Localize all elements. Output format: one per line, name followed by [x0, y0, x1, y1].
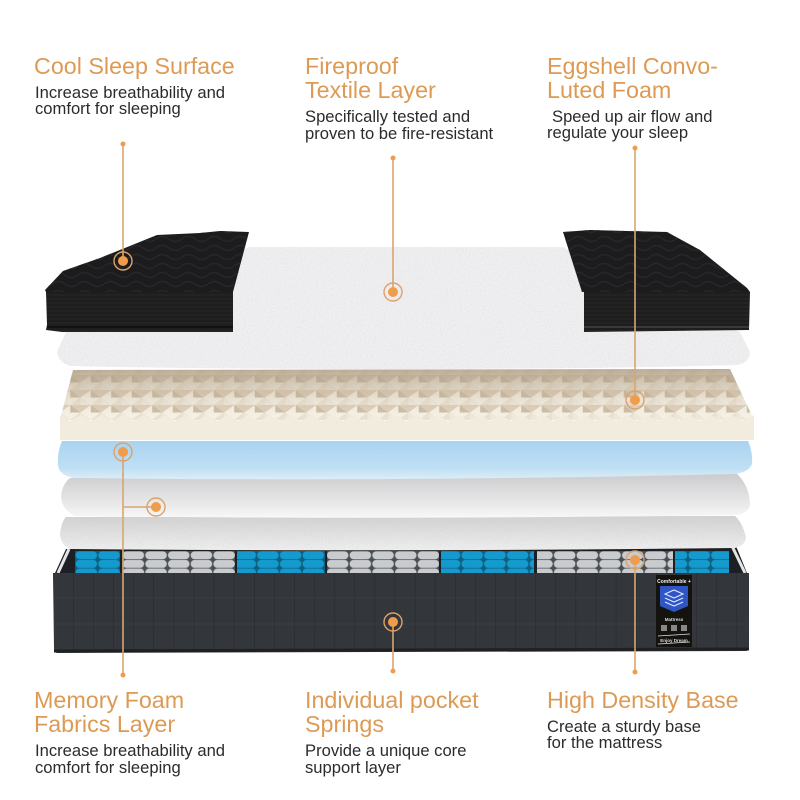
text: memory foam fabrics layer: Memory Foam [34, 687, 184, 713]
text: high density base: Create a sturdy base [547, 717, 701, 736]
callout: high density base [384, 613, 402, 674]
base cover [53, 573, 749, 653]
text: high density base [547, 687, 739, 752]
text: cool sleep surface: Increase breathability and [35, 83, 225, 102]
callout: fireproof layer [384, 156, 402, 301]
layer: eggshell convoluted foam [60, 369, 754, 440]
text: cool sleep surface: Cool Sleep Surface [34, 53, 235, 79]
text: memory foam fabrics layer [34, 687, 225, 777]
text: individual pocket springs: Provide a unique core [305, 741, 466, 760]
callout: cool sleep surface [114, 142, 132, 270]
product label: Enjoy Dream [660, 638, 688, 643]
layer: fireproof textile [57, 247, 750, 369]
text: eggshell convo-luted foam: Speed up air flow and [552, 107, 713, 126]
text: eggshell convo-luted foam [547, 53, 718, 142]
text: eggshell convo-luted foam: regulate your sleep [547, 123, 688, 142]
text: memory foam fabrics layer: comfort for sleeping [35, 758, 181, 777]
text: memory foam fabrics layer: Increase breathability and [35, 741, 225, 760]
text: cool sleep surface [34, 53, 235, 118]
product label: Comfortable + [657, 579, 691, 585]
text: individual pocket springs: support layer [305, 758, 401, 777]
layer: blue memory foam [58, 441, 752, 479]
callout: memory foam [114, 443, 165, 678]
text: fireproof textile layer [305, 53, 494, 143]
product label [656, 575, 692, 647]
product label: Mattress [665, 617, 684, 622]
text: individual pocket springs: Springs [305, 711, 384, 737]
text: memory foam fabrics layer: Fabrics Layer [34, 711, 175, 737]
text: eggshell convo-luted foam: Luted Foam [547, 77, 671, 103]
layer: terry knit cover [60, 516, 746, 550]
text: fireproof textile layer: Textile Layer [305, 77, 436, 103]
text: cool sleep surface: comfort for sleeping [35, 99, 181, 118]
text: fireproof textile layer: Fireproof [305, 53, 399, 79]
spring frame [55, 546, 747, 573]
cool sleep surface: right black panel [563, 230, 750, 332]
text: high density base: for the mattress [547, 733, 662, 752]
mattress base with springs [53, 546, 749, 653]
text: fireproof textile layer: proven to be fire-resistant [305, 124, 494, 143]
text: individual pocket springs: Individual pocket [305, 687, 479, 713]
cool sleep surface: left black panel [45, 231, 249, 332]
layer: grey comfort foam [61, 472, 750, 518]
text: eggshell convo-luted foam: Eggshell Convo- [547, 53, 718, 79]
text: fireproof textile layer: Specifically tested and [305, 107, 470, 126]
text: individual pocket springs [305, 687, 479, 777]
callout: pocket springs [626, 551, 644, 674]
callout: eggshell foam [626, 146, 644, 409]
pocket springs: blue and grey rows [75, 551, 729, 573]
text: high density base: High Density Base [547, 687, 739, 713]
